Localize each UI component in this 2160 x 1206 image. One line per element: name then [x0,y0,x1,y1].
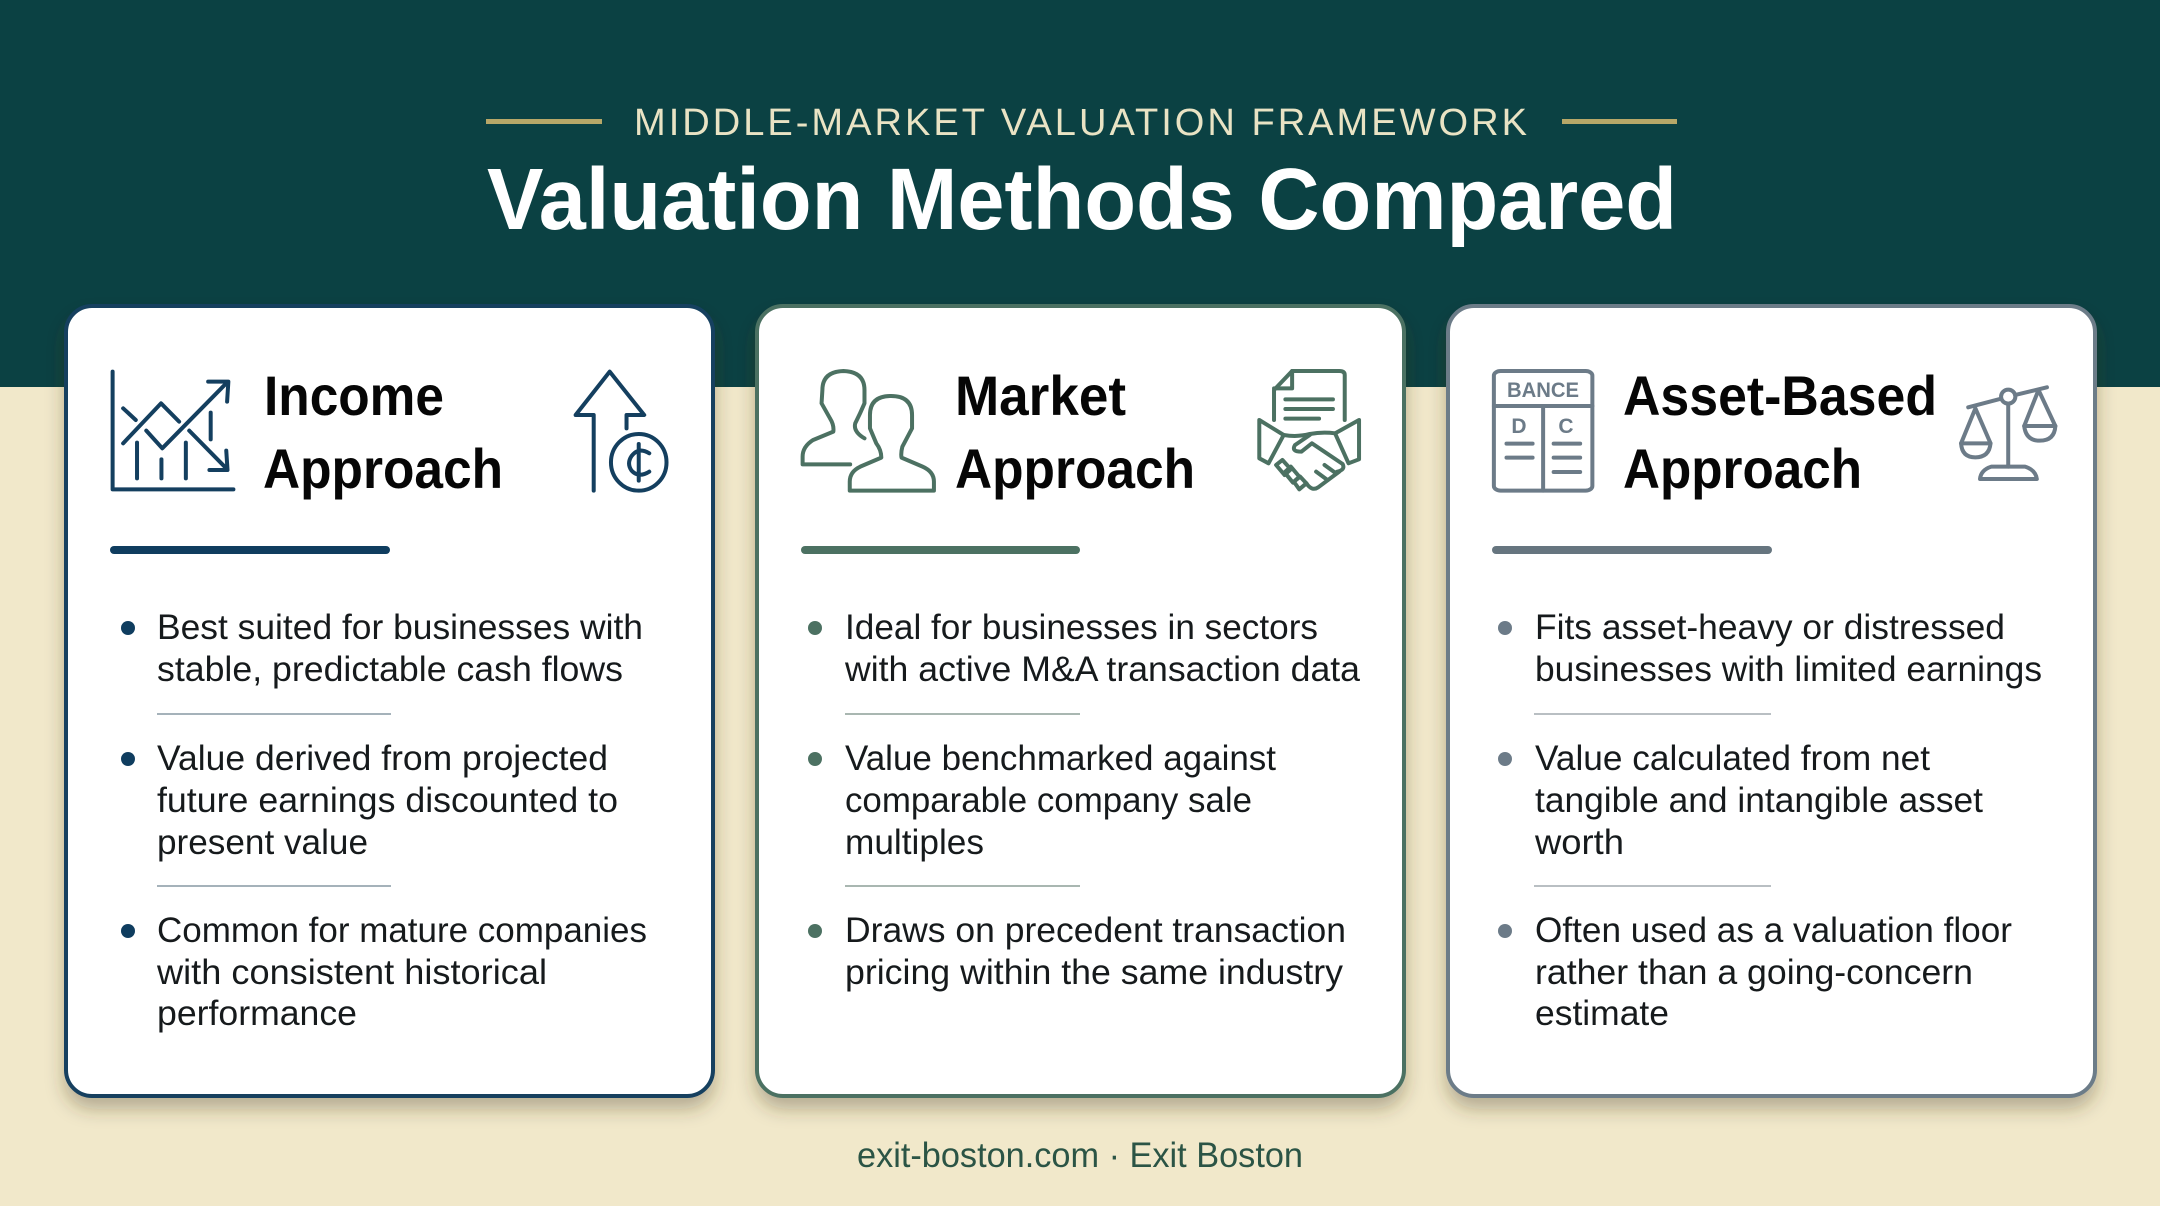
bullet 3: Draws on precedent transaction [845,911,1346,950]
card background [757,306,1404,1096]
bullet 1: Ideal for businesses in sectors [845,608,1318,647]
bullet 3 [121,911,647,1033]
bullet 1: Best suited for businesses with [157,608,643,647]
bullet 2: worth [1534,823,1624,862]
header eyebrow with gold rules: MIDDLE-MARKET VALUATION FRAMEWORK [634,102,1530,144]
bullet 2: tangible and intangible asset [1535,781,1983,820]
balance sheet frame [1494,371,1592,491]
heading: Asset-Based [1623,364,1937,427]
bullet 1: with active M&A transaction data [844,650,1361,689]
header band [0,0,2160,387]
bullet 2 [1498,739,1983,862]
bullet 2 [121,739,618,862]
heading: Approach [955,437,1195,500]
title: Valuation Methods Compared [487,151,1677,248]
icon: balance sheet: BANCE [1507,379,1579,402]
bullet 2: comparable company sale [845,781,1252,820]
accent bar [801,546,1080,554]
bullet 3: Common for mature companies [157,911,647,950]
icon: two people [803,371,934,491]
heading [955,364,1195,500]
panel: income approach [66,306,713,1096]
heading: Market [955,364,1126,427]
bullet 3: performance [157,994,357,1033]
card background [1448,306,2095,1096]
bullet 2: future earnings discounted to [157,781,618,820]
bullet 2: Value derived from projected [157,739,608,778]
bullet 3 [808,911,1346,992]
heading [1623,364,1937,500]
bullet 1: stable, predictable cash flows [157,650,623,689]
icon: document and handshake [1259,371,1359,489]
bullet 3: pricing within the same industry [845,953,1344,992]
accent bar [1492,546,1772,554]
bullet 3 [1498,911,2012,1033]
bullet 3: Often used as a valuation floor [1535,911,2012,950]
heading: Approach [1623,437,1862,500]
bullet 2: multiples [845,823,984,862]
heading: Income [264,364,444,427]
bullet 1 [808,608,1361,689]
icon: scales [1961,387,2055,479]
bullet 3: with consistent historical [156,953,547,992]
icon: balance sheet: D [1511,415,1527,438]
icon: balance sheet [1494,371,1592,491]
panel: asset-based approach [1448,306,2095,1096]
bullet 2 [808,739,1276,862]
bullet 1 [121,608,643,689]
bullet 1: businesses with limited earnings [1535,650,2042,689]
bullet 2: Value benchmarked against [845,739,1276,778]
card background [66,306,713,1096]
icon: balance sheet: C [1558,415,1574,438]
heading: Approach [263,437,503,500]
panel: market approach [757,306,1404,1096]
bullet 2: present value [157,823,368,862]
bullet 3: rather than a going-concern [1535,953,1973,992]
bullet 3: estimate [1535,994,1669,1033]
accent bar [110,546,390,554]
icon: up arrow with coin [576,372,667,491]
bullet 1 [1498,608,2042,689]
heading [263,364,503,500]
footer: exit-boston.com · Exit Boston [857,1136,1303,1175]
icon: line chart with arrows [113,372,233,489]
bullet 1: Fits asset-heavy or distressed [1535,608,2005,647]
bullet 2: Value calculated from net [1535,739,1930,778]
